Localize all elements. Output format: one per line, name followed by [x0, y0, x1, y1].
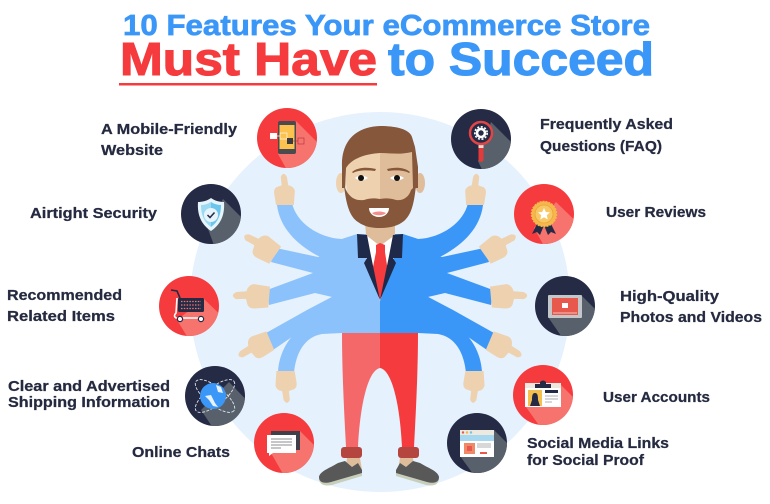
neck [365, 222, 395, 246]
icon: mobile phone [257, 108, 317, 168]
trousers [342, 333, 380, 447]
ankles [345, 458, 362, 472]
title: 10 Features Your eCommerce Store [123, 10, 650, 42]
left hands [232, 174, 297, 403]
label: photos and videos: Photos and Videos [620, 309, 762, 326]
label: online chats: Online Chats [132, 444, 230, 461]
label: recommended items: Recommended [7, 287, 122, 304]
label: faq: Questions (FAQ) [540, 138, 662, 155]
face [345, 150, 380, 222]
label: recommended items [7, 287, 122, 325]
label: mobile-friendly [101, 121, 238, 159]
label: social media [527, 435, 669, 469]
hair [342, 126, 418, 188]
icon: magnifier with gear [451, 109, 511, 169]
label: security: Airtight Security [30, 205, 158, 222]
eyes [355, 175, 404, 181]
icon: globe [185, 366, 245, 426]
icon: web page [447, 413, 507, 473]
ears [336, 173, 346, 193]
lapels [357, 234, 403, 300]
label: photos and videos: High-Quality [620, 288, 720, 305]
label: mobile-friendly: A Mobile-Friendly [101, 121, 238, 138]
left arms [266, 203, 358, 373]
right hands [463, 174, 528, 403]
beard [344, 185, 416, 228]
eyebrows [352, 168, 410, 173]
mouth [369, 208, 389, 217]
right shoe [396, 461, 439, 485]
icon: shield [181, 184, 241, 244]
title: Must Have [120, 33, 377, 85]
jacket [335, 234, 380, 333]
icon: shopping cart [159, 276, 219, 336]
label: user reviews: User Reviews [606, 204, 706, 221]
left shoe [319, 461, 362, 485]
icon: chat [254, 413, 314, 473]
label: shipping: Clear and Advertised [8, 378, 170, 395]
title: to Succeed [388, 33, 654, 85]
icon: award badge [514, 184, 574, 244]
trouser cuffs [341, 447, 362, 458]
icon: video tablet [535, 276, 595, 336]
label: shipping [8, 378, 170, 411]
label: mobile-friendly: Website [101, 142, 163, 159]
label: photos and videos [620, 288, 762, 326]
title [119, 10, 654, 86]
label: social media: for Social Proof [527, 452, 645, 469]
label: faq: Frequently Asked [540, 116, 673, 133]
label: faq [540, 116, 673, 155]
label: social media: Social Media Links [527, 435, 669, 452]
icon: id badge [513, 365, 573, 425]
label: user accounts: User Accounts [603, 389, 710, 406]
label: recommended items: Related Items [7, 308, 115, 325]
background circle [190, 112, 570, 492]
character [232, 126, 528, 485]
label: shipping: Shipping Information [8, 394, 170, 411]
tie [372, 243, 388, 300]
shirt [366, 234, 394, 301]
right arms [402, 203, 494, 373]
